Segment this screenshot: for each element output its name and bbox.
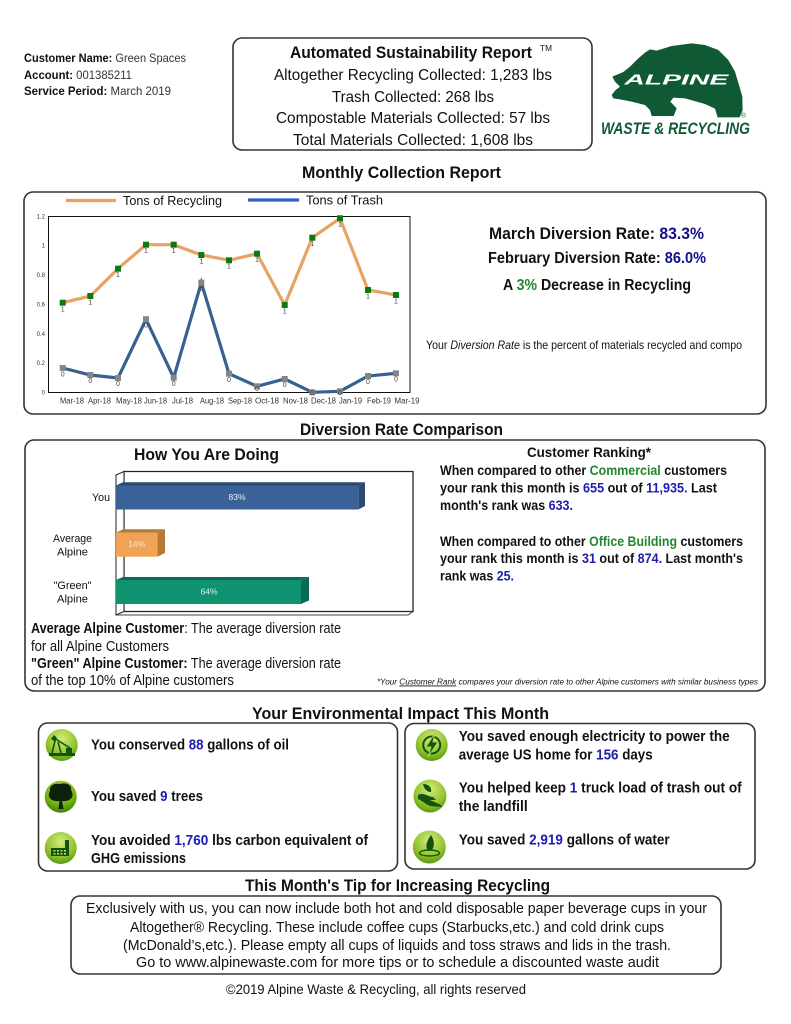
ranking: office building customers: rank was 25. <box>440 568 514 584</box>
summary totals <box>274 67 552 149</box>
customer details: Service Period: March 2019 <box>24 84 171 98</box>
series: tons of recycling: 1 <box>227 264 231 270</box>
y axis labels: 0.6 <box>37 302 46 308</box>
series: tons of trash: 0 <box>227 377 231 384</box>
heading: monthly collection report: Monthly Collection Report <box>302 164 501 182</box>
summary totals: Altogether Recycling Collected: 1,283 lbs <box>274 67 552 84</box>
chart definitions: of the top 10% of Alpine customers <box>31 673 234 689</box>
panel: recycling tip: Go to www.alpinewaste.com for more tips or to schedule a discounted waste audit <box>136 955 659 971</box>
category labels: "Green" <box>54 580 92 592</box>
x axis labels: Jun-18 <box>144 396 167 406</box>
y axis labels: 0.4 <box>37 332 46 338</box>
logo: Alpine Waste & Recycling: WASTE & RECYCLING <box>601 119 750 138</box>
series: tons of trash: 0 <box>394 376 398 384</box>
series: tons of recycling: 1 <box>172 248 176 255</box>
diversion rate summary: March Diversion Rate: 83.3% <box>489 225 704 243</box>
series: tons of recycling: 1 <box>366 294 370 300</box>
text: trees saved: You saved 9 trees <box>91 789 203 805</box>
x axis labels: Nov-18 <box>283 396 308 406</box>
chart definitions: for all Alpine Customers <box>31 639 169 655</box>
chart definitions <box>31 621 341 689</box>
series: tons of trash: 0 <box>61 372 65 378</box>
text: electricity saved <box>459 729 730 764</box>
series: tons of trash: 0 <box>338 390 342 397</box>
series: tons of recycling <box>60 215 399 316</box>
bar: average alpine 14%: 14% <box>128 539 146 549</box>
bar chart: diversion comparison <box>53 472 413 615</box>
y axis labels: 0.2 <box>37 361 46 367</box>
customer ranking: Customer Ranking* <box>527 444 652 460</box>
chart legend: Tons of Recycling <box>123 194 222 208</box>
x axis labels: Apr-18 <box>88 396 111 406</box>
text: oil conserved: You conserved 88 gallons of oil <box>91 738 289 754</box>
series: tons of recycling: 1 <box>394 298 398 306</box>
series: tons of trash: 0 <box>88 378 92 385</box>
series: tons of recycling: 1 <box>61 306 65 314</box>
y axis labels: 0.8 <box>37 273 46 279</box>
text: electricity saved: You saved enough electricity to power the <box>459 729 730 745</box>
series: tons of trash: 0 <box>283 382 287 389</box>
series: tons of recycling: 1 <box>283 308 287 316</box>
x axis labels: Feb-19 <box>367 396 391 406</box>
customer details: Account: 001385211 <box>24 68 132 82</box>
x axis labels: Mar-18 <box>60 396 84 406</box>
logo: Alpine Waste & Recycling <box>601 43 750 138</box>
bar: green alpine 64%: 64% <box>200 586 218 596</box>
x axis labels: Jan-19 <box>339 396 362 406</box>
series: tons of recycling: 1 <box>88 300 92 306</box>
footer: copyright: ©2019 Alpine Waste & Recycling, all rights reserved <box>226 981 526 997</box>
ranking: office building customers: When compared to other Office Building customers <box>440 533 743 549</box>
panel: report summary <box>233 38 592 150</box>
category labels: Alpine <box>57 594 88 606</box>
text: truck load: the landfill <box>459 799 528 815</box>
y axis labels: 0 <box>42 390 46 396</box>
text: truck load: You helped keep 1 truck load of trash out of <box>459 780 742 796</box>
series: tons of trash: 0 <box>366 379 370 386</box>
chart legend <box>66 194 383 208</box>
logo: Alpine Waste & Recycling: ® <box>741 111 746 119</box>
x axis labels: Oct-18 <box>255 396 279 406</box>
category labels: Alpine <box>57 546 88 558</box>
summary totals: Total Materials Collected: 1,608 lbs <box>293 132 533 149</box>
text: truck load <box>459 780 742 815</box>
summary totals: Compostable Materials Collected: 57 lbs <box>276 110 550 127</box>
panel: environmental impact right <box>405 724 755 869</box>
series: tons of trash: 0 <box>172 381 176 388</box>
x axis labels <box>60 396 420 406</box>
customer ranking <box>440 444 743 584</box>
x axis labels: Sep-18 <box>228 396 252 406</box>
panel: diversion rate comparison <box>25 440 765 691</box>
x axis labels: May-18 <box>116 396 142 406</box>
series: tons of recycling: 1 <box>338 222 342 228</box>
diversion rate definition: Your Diversion Rate is the percent of materials recycled and compo <box>426 338 742 352</box>
icon: factory <box>45 832 77 864</box>
bar: average alpine 14% <box>116 529 165 557</box>
ranking: office building customers <box>440 533 743 584</box>
panel: report summary: TM <box>540 44 552 53</box>
chart legend: Tons of Trash <box>306 194 383 208</box>
summary totals: Trash Collected: 268 lbs <box>332 89 494 106</box>
series: tons of trash: 0 <box>116 381 120 388</box>
text: GHG avoided: You avoided 1,760 lbs carbon equivalent of <box>91 833 368 849</box>
icon: oil pump <box>46 729 78 761</box>
heading: recycling tip: This Month's Tip for Increasing Recycling <box>245 877 550 895</box>
ranking: office building customers: your rank this month is 31 out of 874. Last month's <box>440 550 743 566</box>
series: tons of trash: 0 <box>144 322 148 330</box>
logo: Alpine Waste & Recycling: ALPINE <box>622 72 731 88</box>
x axis labels: Dec-18 <box>311 396 336 406</box>
series: tons of trash <box>60 280 399 397</box>
ranking: commercial customers: month's rank was 633. <box>440 497 573 513</box>
line chart: tons per month <box>37 214 420 406</box>
series: tons of recycling: 1 <box>116 272 120 279</box>
icon: water drop <box>413 830 446 864</box>
series: tons of recycling: 1 <box>199 258 203 266</box>
panel: environmental impact left <box>38 723 398 871</box>
diversion rate summary: February Diversion Rate: 86.0% <box>488 250 706 267</box>
ranking: commercial customers: When compared to other Commercial customers <box>440 462 727 478</box>
icon: tree <box>45 781 77 813</box>
icon: lightning bolt <box>416 729 448 761</box>
bar: green alpine 64% <box>116 577 309 604</box>
heading: environmental impact: Your Environmental Impact This Month <box>252 705 549 723</box>
text: GHG avoided: GHG emissions <box>91 851 186 867</box>
x axis labels: Jul-18 <box>172 396 193 406</box>
text: electricity saved: average US home for 156 days <box>459 748 653 764</box>
ranking: commercial customers: your rank this month is 655 out of 11,935. Last <box>440 480 717 496</box>
category labels <box>53 492 110 606</box>
footnote: customer rank: *Your Customer Rank compares your diversion rate to other Alpine customers with similar business types <box>377 676 759 686</box>
heading: how you are doing: How You Are Doing <box>134 446 279 464</box>
ranking: commercial customers <box>440 462 727 513</box>
x axis labels: Aug-18 <box>200 396 224 406</box>
bar: you 83%: 83% <box>228 492 246 502</box>
diversion rate summary: A 3% Decrease in Recycling <box>503 277 691 294</box>
series: tons of trash: 0 <box>255 386 259 393</box>
category labels: You <box>92 492 110 504</box>
series: tons of trash: 0 <box>199 286 203 293</box>
text: water saved: You saved 2,919 gallons of water <box>459 832 670 848</box>
chart definitions: "Green" Alpine Customer: The average diversion rate <box>31 656 341 672</box>
y axis labels: 1 <box>42 244 46 250</box>
panel: recycling tip: (McDonald’s,etc.). Please empty all cups of liquids and toss straws and lids in the trash. <box>123 938 671 954</box>
chart definitions: Average Alpine Customer: The average diversion rate <box>31 621 341 637</box>
y axis labels: 1.2 <box>37 214 46 220</box>
customer details: Customer Name: Green Spaces <box>24 51 186 65</box>
panel: recycling tip: Altogether® Recycling. These include coffee cups (Starbucks,etc.) and cold drink cups <box>130 920 664 936</box>
heading: diversion rate comparison: Diversion Rate Comparison <box>300 421 503 439</box>
series: tons of recycling: 1 <box>144 248 148 255</box>
panel: recycling tip: Exclusively with us, you can now include both hot and cold disposable paper beverage cups in your <box>86 901 707 917</box>
y axis labels <box>37 214 46 396</box>
panel: monthly collection <box>24 192 766 414</box>
panel: recycling tip <box>71 896 721 974</box>
category labels: Average <box>53 533 92 545</box>
report title: Automated Sustainability Report <box>290 44 532 62</box>
text: GHG avoided <box>91 833 368 867</box>
x axis labels: Mar-19 <box>394 396 420 406</box>
series: tons of trash: 0 <box>310 390 314 397</box>
icon: hand with leaf <box>414 780 446 812</box>
series: tons of recycling: 1 <box>310 241 314 248</box>
customer details <box>24 51 186 98</box>
diversion rate summary <box>488 225 706 294</box>
series: tons of recycling: 1 <box>255 257 259 264</box>
bar: you 83% <box>116 482 365 510</box>
